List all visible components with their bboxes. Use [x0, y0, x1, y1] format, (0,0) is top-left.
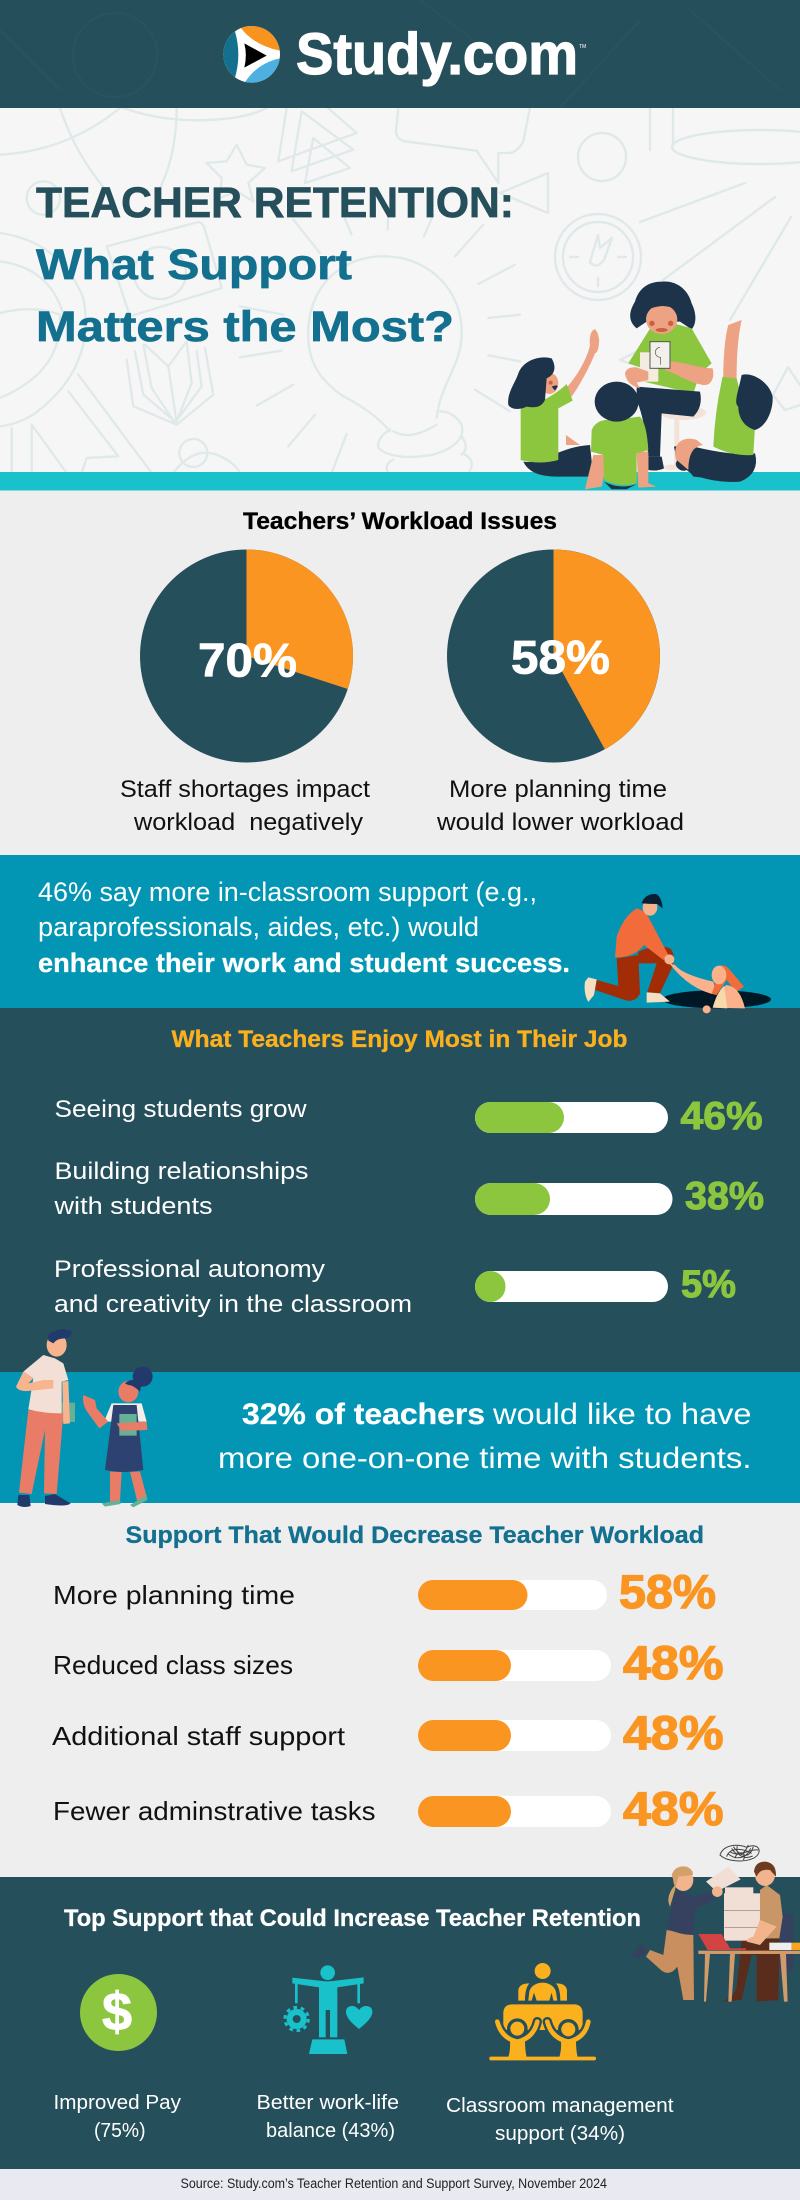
caption: improved pay	[54, 2092, 181, 2142]
logo wordmark: TM	[579, 44, 586, 50]
icon: dollar coin	[80, 1974, 157, 2051]
row: more planning time	[53, 1565, 716, 1618]
panel: source footer	[0, 2169, 800, 2200]
pie chart: 58%	[447, 550, 660, 762]
illustration: overwhelmed teachers with paper stack	[632, 1845, 800, 2002]
row: seeing students grow: 46%	[680, 1095, 762, 1138]
panel: teachers' workload issues	[0, 491, 800, 855]
panel: in-classroom support callout	[0, 855, 800, 1008]
row: fewer administrative tasks: 48%	[623, 1782, 724, 1835]
row: professional autonomy: 5%	[681, 1263, 736, 1306]
caption: work-life balance: balance (43%)	[266, 2120, 395, 2142]
caption: classroom management: Classroom management	[446, 2095, 674, 2117]
row: seeing students grow	[54, 1095, 762, 1138]
logo wordmark: Study.com	[296, 22, 578, 87]
icon: dollar coin: $	[102, 1982, 132, 2042]
row: additional staff support	[52, 1706, 724, 1759]
heading: Teachers’ Workload Issues	[243, 508, 557, 535]
title	[36, 179, 514, 351]
panel: one-on-one callout	[0, 1372, 800, 1503]
row: fewer administrative tasks: Fewer adminstrative tasks	[53, 1796, 376, 1826]
callout text	[38, 877, 570, 978]
illustration: teacher with children	[508, 281, 773, 489]
row: building relationships	[53, 1158, 764, 1220]
panel: top support for retention	[0, 1877, 800, 2169]
caption: work-life balance: Better work-life	[256, 2092, 399, 2114]
caption: work-life balance	[256, 2092, 399, 2142]
row: additional staff support: 48%	[623, 1706, 724, 1759]
row: reduced class sizes: Reduced class sizes	[53, 1650, 293, 1680]
source text: Source: Study.com’s Teacher Retention and Support Survey, November 2024	[180, 2176, 607, 2191]
background doodle pattern	[0, 98, 800, 473]
caption: planning time: More planning time	[449, 776, 667, 803]
callout text	[218, 1398, 752, 1475]
caption: classroom management: support (34%)	[495, 2123, 625, 2145]
row: professional autonomy: Professional autonomy	[54, 1256, 325, 1283]
icon: Study.com logo	[223, 26, 280, 83]
caption: classroom management	[446, 2095, 674, 2145]
row: building relationships: with students	[53, 1193, 213, 1220]
panel: support that would decrease workload	[0, 1503, 800, 1877]
row: more planning time: 58%	[619, 1565, 716, 1618]
caption: staff shortages: workload negatively	[133, 809, 363, 836]
caption: planning time	[436, 776, 684, 836]
caption: improved pay: (75%)	[94, 2120, 146, 2142]
row: reduced class sizes	[53, 1636, 724, 1689]
row: professional autonomy: and creativity in the classroom	[54, 1291, 412, 1318]
callout text: more one-on-one time with students.	[218, 1442, 752, 1475]
illustration: man helping woman out of a hole	[585, 894, 771, 1013]
row: more planning time: More planning time	[53, 1580, 295, 1610]
callout text: paraprofessionals, aides, etc.) would	[38, 912, 479, 942]
illustration: teacher and student	[16, 1329, 153, 1507]
callout text: 32% of teachers	[242, 1398, 485, 1431]
title line 2: What Support	[36, 241, 352, 289]
row: building relationships: Building relationships	[54, 1158, 308, 1185]
panel: what teachers enjoy	[0, 1008, 800, 1372]
icon: classroom management	[489, 1963, 596, 2060]
pie chart: 70%: 70%	[198, 634, 297, 686]
row: additional staff support: Additional staff support	[52, 1721, 346, 1751]
row: fewer administrative tasks	[53, 1782, 724, 1835]
icon: work-life balance scale	[285, 1965, 372, 2054]
callout text: 46% say more in-classroom support (e.g.,	[38, 877, 537, 907]
title line 3: Matters the Most?	[36, 303, 454, 351]
callout text: enhance their work and student success.	[38, 948, 570, 978]
row: professional autonomy	[54, 1256, 736, 1318]
callout text: would like to have	[492, 1398, 752, 1431]
heading: Support That Would Decrease Teacher Workload	[126, 1522, 704, 1549]
panel: hero	[0, 98, 800, 473]
caption: staff shortages: Staff shortages impact	[120, 776, 370, 803]
pie chart: 58%: 58%	[511, 630, 610, 684]
pie chart: 70%	[140, 550, 353, 762]
panel: header	[0, 0, 800, 108]
caption: staff shortages	[120, 776, 370, 836]
title line 1: TEACHER RETENTION:	[36, 179, 514, 227]
heading: What Teachers Enjoy Most in Their Job	[172, 1026, 628, 1053]
caption: planning time: would lower workload	[436, 809, 684, 836]
row: seeing students grow: Seeing students grow	[54, 1096, 307, 1123]
row: building relationships: 38%	[685, 1175, 764, 1218]
row: reduced class sizes: 48%	[623, 1636, 724, 1689]
caption: improved pay: Improved Pay	[54, 2092, 181, 2114]
teal strip	[0, 472, 800, 490]
heading: Top Support that Could Increase Teacher Retention	[64, 1905, 641, 1932]
